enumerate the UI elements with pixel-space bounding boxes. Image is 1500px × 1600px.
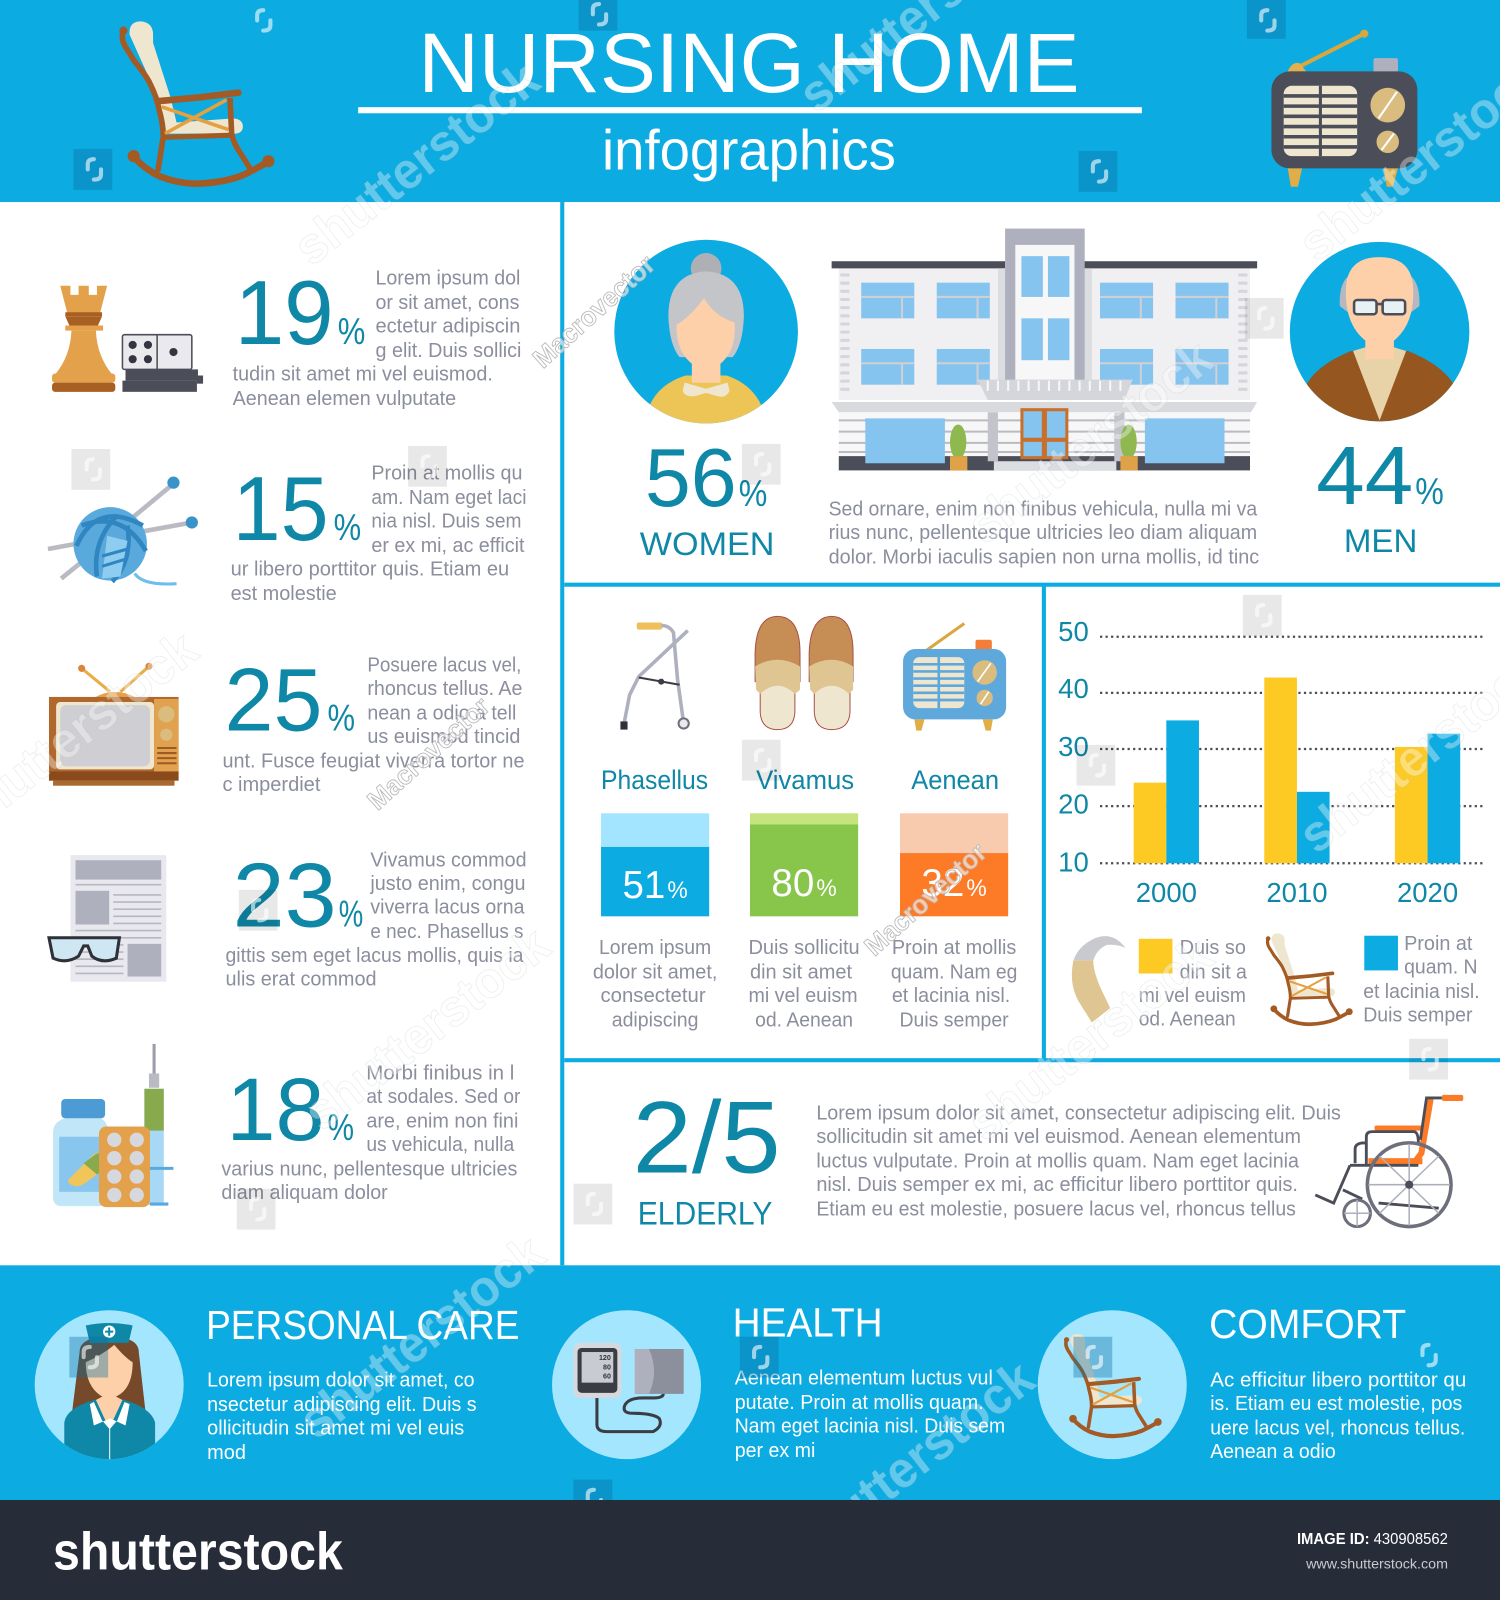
text block: diam aliquam dolor [221,1182,388,1204]
icon: yarn ball and needles [48,477,198,584]
bar chart: 40 [1058,673,1089,704]
text block: Posuere lacus vel, [367,654,521,676]
bar chart: 2000 [1136,877,1197,908]
text block: Sed ornare, enim non finibus vehicula, nulla mi va [829,498,1258,520]
text block: sollicitudin sit amet mi vel euismod. Aenean elementum [816,1126,1301,1148]
text block: est molestie [231,583,337,605]
icon: rocking chair [119,21,274,184]
stat 23 percent: % [339,894,363,935]
footer bar [0,1500,1500,1600]
site url: www.shutterstock.com [1305,1556,1448,1572]
icon: television [49,663,179,786]
women stat [640,431,774,562]
text block [231,463,527,605]
women stat: 56 [645,431,737,524]
bar: 51 percent [601,813,709,916]
text block: rius nunc, pellentesque ultricies leo diam aliquam [829,522,1257,544]
stat 25 percent [49,651,524,796]
captions [593,937,1017,1032]
icon: blood pressure monitor: 120 [599,1354,611,1362]
text block: gittis sem eget lacus mollis, quis ia [226,945,524,967]
captions: adipiscing [612,1010,698,1032]
panel: header band [0,0,1500,202]
men stat [1316,429,1444,559]
bar: 51 percent: 51 [622,864,665,907]
text block: g elit. Duis sollici [376,340,521,362]
stat 19 percent [52,263,521,410]
text block: are, enim non fini [366,1111,518,1133]
labels: Phasellus [601,765,708,795]
heading and text: health: HEALTH [733,1300,883,1346]
bar chart: 50 [1058,616,1089,647]
heading and text: health: Nam eget lacinia nisl. Duis sem [735,1416,1005,1438]
legend [1072,933,1480,1031]
text block: Etiam eu est molestie, posuere lacus vel, rhoncus tellus [816,1198,1296,1220]
legend swatch yellow [1139,939,1172,973]
bar chart: 30 [1058,731,1089,762]
panel: activities [48,263,527,1207]
bar chart: 2020 [1397,877,1458,908]
legend text: quam. N [1404,956,1478,978]
icon: small rocking chair [1266,933,1353,1024]
text block: nia nisl. Duis sem [371,511,521,533]
captions: mi vel euism [748,985,858,1007]
heading and text: personal care: ollicitudin sit amet mi vel euis [207,1418,464,1440]
diagonal watermarks: Macrovector [527,249,661,374]
diagonal watermarks: shutterstock [288,1223,555,1449]
captions: consectetur [601,985,706,1007]
men stat: 44 [1316,429,1413,522]
text block: nean a odio a tell [367,702,516,724]
heading and text: comfort [1209,1301,1466,1463]
legend text: et lacinia nisl. [1363,981,1480,1003]
icon: blood pressure monitor: 80 [603,1363,611,1371]
icon: chess rook, dominoes and books [52,286,203,392]
stat 19 percent: 19 [235,263,334,364]
image id: IMAGE ID: 430908562 [1297,1531,1448,1548]
captions: Proin at mollis [892,937,1016,959]
panel: elderly: ELDERLY [638,1194,773,1231]
heading and text: health: Aenean elementum luctus vul [735,1368,993,1390]
icon: hearing aid [1072,936,1126,1022]
heading and text: comfort: COMFORT [1209,1301,1406,1347]
heading and text: comfort: is. Etiam eu est molestie, pos [1210,1393,1462,1415]
text block: Lorem ipsum dol [376,268,520,290]
legend text: Proin at [1404,933,1473,955]
stat 18 percent: % [328,1107,354,1148]
text block: nisl. Duis semper ex mi, ac efficitur libero porttitor quis. [816,1174,1298,1196]
heading and text: personal care: nsectetur adipiscing elit. Duis s [207,1394,477,1416]
stat 25 percent: % [328,698,355,739]
icon: slippers [755,616,853,730]
legend text: mi vel euism [1139,985,1246,1007]
text block: us vehicula, nulla [366,1134,515,1156]
title: NURSING HOME [418,15,1080,110]
panel: residents [614,229,1469,568]
men stat: % [1415,471,1444,512]
captions: dolor sit amet, [593,962,717,984]
icon: walker [620,622,689,730]
icon: blood pressure monitor [552,1310,701,1459]
stat 25 percent: 25 [224,651,322,750]
diagonal watermarks: shutterstock [778,1349,1045,1575]
heading and text: comfort: Ac efficitur libero porttitor qu [1210,1370,1466,1392]
stat 23 percent: 23 [233,846,337,947]
icon: elderly woman [614,240,798,429]
captions: Duis sollicitu [748,937,860,959]
footer logo: shutterstock [53,1522,343,1581]
captions: et lacinia nisl. [892,985,1010,1007]
bar: 51 percent: % [667,877,688,904]
text block: am. Nam eget laci [371,487,527,509]
bar: 80 percent: 80 [771,862,814,905]
text block: dolor. Morbi iaculis sapien non urna mollis, id tinc [829,546,1259,568]
text block: Vivamus commod [370,849,527,871]
panel dividers [560,202,1500,1265]
text block: e nec. Phasellus s [370,921,523,943]
text block [221,1063,521,1204]
icon: nursing home building [832,229,1257,470]
stat 15 percent [48,459,527,605]
panel: equipment percentages [593,616,1017,1032]
labels [601,765,999,795]
text block: Morbi finibus in l [366,1063,514,1085]
bar chart: 10 [1058,846,1089,877]
legend text: od. Aenean [1139,1009,1236,1031]
text block [233,268,521,410]
stat 23 percent [49,846,527,991]
panel: bottom band [0,1265,1500,1500]
panel: elderly: 2/5 [633,1080,781,1194]
text block: ulis erat commod [226,969,377,991]
text block: Proin at mollis qu [371,463,522,485]
heading and text: personal care [206,1302,519,1464]
icon: elderly man [1290,242,1469,429]
captions: Lorem ipsum [599,937,711,959]
text block: ectetur adipiscin [376,316,520,338]
text block [829,498,1259,568]
text block: unt. Fusce feugiat viverra tortor ne [222,750,524,772]
heading and text: personal care: Lorem ipsum dolor sit amet, co [207,1370,474,1392]
subtitle: infographics [602,118,896,181]
diagonal watermarks: shutterstock [956,328,1224,555]
bar chart: 2010 [1266,877,1328,908]
text block: luctus vulputate. Proin at mollis quam. Nam eget lacinia [816,1150,1300,1172]
captions: quam. Nam eg [891,962,1017,984]
legend text: din sit a [1180,962,1248,984]
men stat: MEN [1344,522,1417,559]
icon: nurse [35,1310,184,1461]
heading and text: health [733,1300,1005,1462]
diagonal watermarks: shutterstock [283,50,550,276]
text block: varius nunc, pellentesque ultricies [221,1159,517,1181]
icon: medicine bottle, blister and syringe [53,1044,173,1207]
icon: comfort rocking chair [1038,1310,1187,1459]
text block: justo enim, congu [369,873,526,895]
legend text: Duis so [1180,937,1246,959]
bar: 32 percent: 32 [921,862,964,905]
text block: er ex mi, ac efficit [371,535,525,557]
bar: 32 percent [900,813,1008,916]
icon: newspaper and glasses [49,855,166,982]
text block: tudin sit amet mi vel euismod. [233,364,493,386]
text block: Aenean elemen vulputate [233,388,456,410]
heading and text: comfort: uere lacus vel, rhoncus tellus. [1210,1418,1465,1440]
labels: Vivamus [756,765,854,795]
bar chart [1058,616,1483,908]
text block: c imperdiet [222,774,321,796]
legend text: Duis semper [1363,1004,1473,1026]
bar: 80 percent [750,813,858,916]
heading and text: health: per ex mi [735,1440,815,1462]
heading and text: personal care: PERSONAL CARE [206,1302,519,1348]
diagonal watermarks: shutterstock [293,915,560,1141]
stat 18 percent [53,1044,521,1207]
text block: Lorem ipsum dolor sit amet, consectetur adipiscing elit. Duis [816,1102,1341,1124]
captions: din sit amet [750,962,852,984]
labels: Aenean [911,765,999,795]
icon: blood pressure monitor: 60 [603,1373,611,1381]
heading and text: health: putate. Proin at mollis quam. [735,1392,984,1414]
women stat: % [739,473,767,514]
text block: rhoncus tellus. Ae [367,678,522,700]
panel: elderly [633,1080,1463,1231]
text block [226,849,527,991]
icon: radio [1271,30,1417,187]
text block: at sodales. Sed or [366,1086,521,1108]
icon: wheelchair [1315,1095,1463,1227]
text block [816,1102,1341,1220]
bar chart: 20 [1058,788,1089,819]
captions: od. Aenean [755,1010,853,1032]
diagonal watermarks: shutterstock [956,925,1224,1152]
stat 18 percent: 18 [227,1060,324,1159]
women stat: WOMEN [640,525,774,562]
legend text [1139,933,1480,1031]
bar: 32 percent: % [966,875,987,902]
icon: blue radio [903,623,1006,731]
heading and text: personal care: mod [207,1442,246,1464]
captions: Duis semper [899,1010,1009,1032]
diagonal watermarks: Macrovector [361,691,495,816]
stat 19 percent: % [338,311,365,352]
text block [222,654,524,796]
diagonal watermarks: Macrovector [858,837,992,962]
heading and text: comfort: Aenean a odio [1210,1441,1336,1463]
text block: us euismod tincid [367,726,520,748]
text block: or sit amet, cons [376,292,519,314]
bar: 80 percent: % [816,875,837,902]
text block: viverra lacus orna [370,896,525,918]
legend swatch blue [1364,936,1398,970]
stat 15 percent: 15 [233,459,329,560]
text block: ur libero porttitor quis. Etiam eu [231,559,509,581]
stat 15 percent: % [334,507,361,548]
